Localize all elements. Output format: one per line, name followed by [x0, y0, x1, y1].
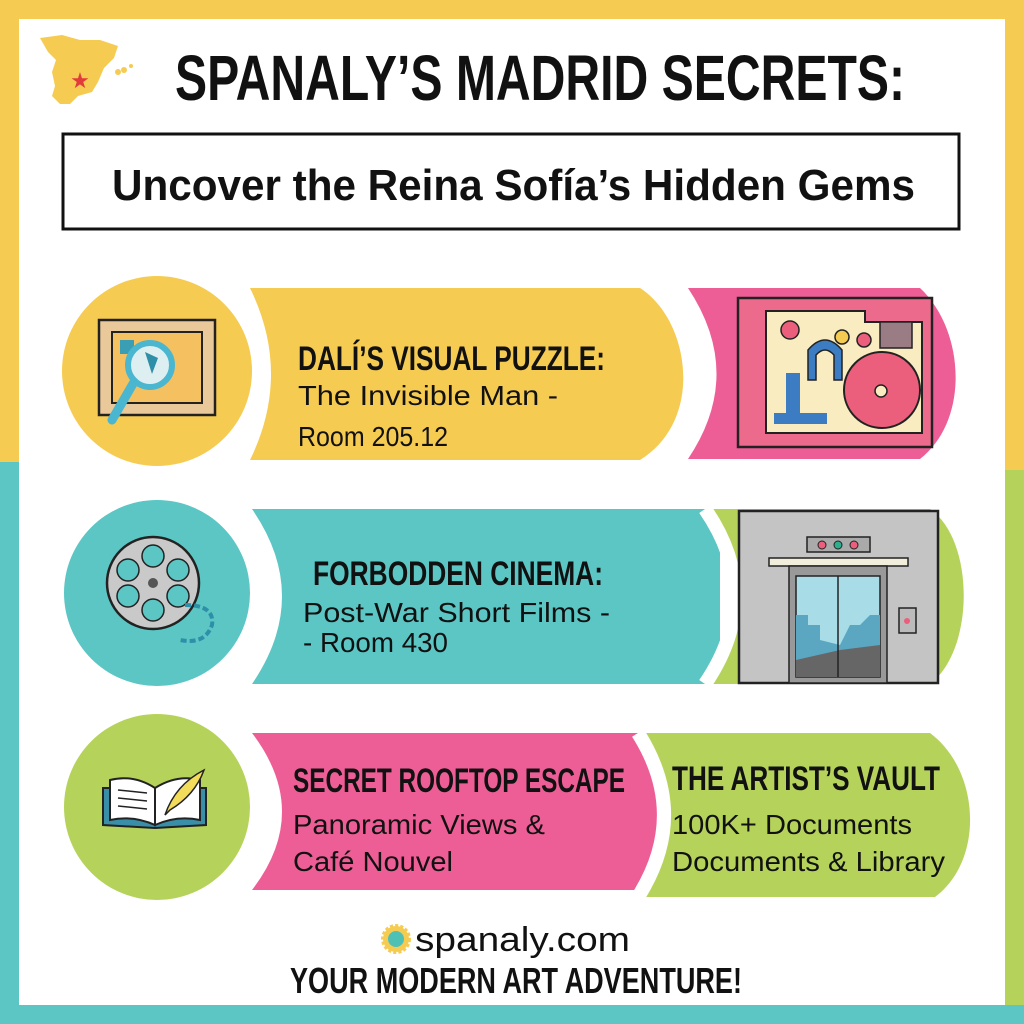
text: tagline: YOUR MODERN ART ADVENTURE!: [290, 960, 742, 1001]
text: dali detail: Room 205.12: [298, 421, 448, 452]
text: vault heading: THE ARTIST’S VAULT: [672, 760, 940, 798]
banner: teal: [252, 509, 720, 684]
text: cinema detail: [303, 597, 610, 658]
row 1: dali: [62, 276, 956, 466]
text: cinema detail: Post-War Short Films -: [303, 597, 610, 628]
text: cinema heading: FORBODDEN CINEMA:: [313, 555, 603, 593]
text: dali heading: DALÍ’S VISUAL PUZZLE:: [298, 340, 605, 378]
footer: [290, 921, 742, 1001]
panel: pink artwork: [688, 288, 956, 459]
banner: yellow: [250, 288, 683, 460]
panel: elevator: [705, 509, 964, 684]
text: vault detail: [672, 809, 945, 877]
subtitle box: [63, 134, 959, 229]
row 3: [64, 714, 970, 900]
text: vault detail: 100K+ Documents: [672, 809, 912, 840]
icon: spain map: ★: [70, 69, 90, 94]
text: dali detail: [298, 380, 558, 452]
banner: pink rooftop: [252, 733, 680, 890]
text: dali detail: The Invisible Man -: [298, 380, 558, 411]
text: rooftop detail: [293, 809, 545, 877]
icon circle: film reel: [64, 500, 250, 686]
icon circle: book with quill: [64, 714, 250, 900]
icon: spain map: [40, 35, 133, 104]
text: vault detail: Documents & Library: [672, 846, 945, 877]
banner: green vault: [638, 733, 970, 897]
text: website: spanaly.com: [415, 921, 630, 959]
icon circle: magnifier painting: [62, 276, 252, 466]
text: rooftop detail: Panoramic Views &: [293, 809, 545, 840]
subtitle box: Uncover the Reina Sofía’s Hidden Gems: [112, 161, 915, 210]
row 2: cinema: [64, 500, 964, 686]
text: cinema detail: - Room 430: [303, 627, 448, 658]
icon: sun logo: [383, 926, 409, 952]
text: rooftop detail: Café Nouvel: [293, 846, 453, 877]
text: rooftop heading: SECRET ROOFTOP ESCAPE: [293, 762, 625, 800]
